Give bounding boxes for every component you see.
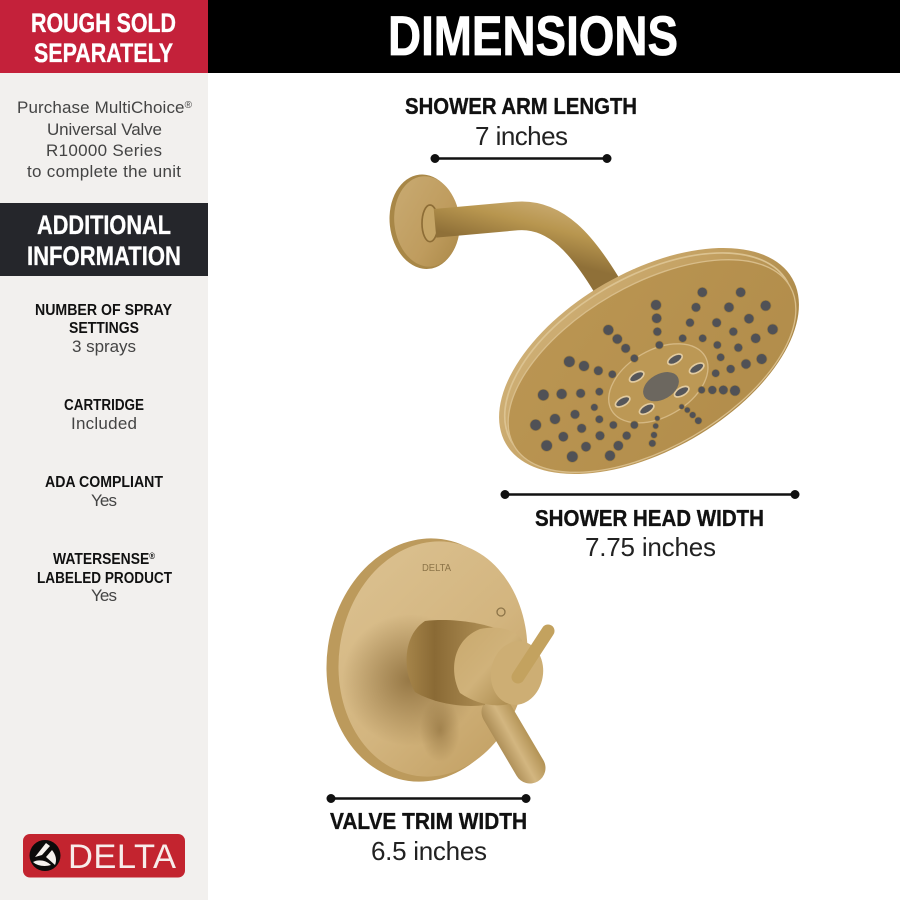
- black title bar: dimensions: [208, 0, 900, 73]
- spec: watersense labeled product: Yes: [91, 586, 117, 605]
- valve cap: [486, 637, 548, 709]
- valve trim width label: 6.5 inches: [371, 836, 487, 866]
- spec: ada compliant: ADA COMPLIANT: [45, 474, 163, 491]
- shower head width dimension line: [501, 490, 799, 498]
- purchase note text: [17, 98, 193, 181]
- center hub: [638, 366, 684, 407]
- shower head width label: [535, 505, 764, 562]
- valve trim width label: VALVE TRIM WIDTH: [330, 808, 527, 834]
- delta logo: [23, 834, 185, 878]
- red header: rough sold separately: SEPARATELY: [34, 38, 173, 68]
- valve trim dimension line: [327, 794, 530, 802]
- purchase note text: Universal Valve: [47, 120, 162, 139]
- purchase note text: Purchase MultiChoice: [17, 98, 185, 117]
- valve front collar: [454, 628, 522, 705]
- purchase note text: to complete the unit: [27, 162, 181, 181]
- shower arm length label: [405, 93, 637, 151]
- shower arm: [435, 216, 607, 285]
- rim highlight: [469, 208, 829, 514]
- trim plate face: [323, 529, 543, 789]
- indicator ring: [497, 608, 505, 616]
- dark header: additional information: ADDITIONAL: [37, 210, 171, 240]
- black title bar: dimensions: DIMENSIONS: [388, 4, 678, 67]
- lower shadow: [420, 698, 460, 762]
- spec: cartridge: CARTRIDGE: [64, 397, 144, 414]
- spec: number of spray settings: SETTINGS: [69, 320, 139, 337]
- spec: cartridge: [64, 397, 144, 433]
- purchase note text: ®: [185, 100, 193, 111]
- spec: watersense labeled product: ®: [149, 551, 155, 561]
- plate logo: DELTA: [422, 563, 451, 574]
- spec: number of spray settings: [35, 302, 172, 356]
- spray nozzles: [530, 287, 778, 462]
- spec: cartridge: Included: [71, 414, 137, 433]
- arm collar: [422, 205, 438, 242]
- red header: rough sold separately: ROUGH SOLD: [31, 8, 176, 38]
- center spray slots: [614, 352, 706, 416]
- spec: watersense labeled product: LABELED PRODUCT: [37, 570, 172, 587]
- dark header: additional information: [0, 203, 208, 276]
- spec: watersense labeled product: WATERSENSE: [53, 551, 164, 568]
- shower head width label: 7.75 inches: [585, 532, 716, 562]
- shower arm length label: SHOWER ARM LENGTH: [405, 93, 637, 119]
- spec: number of spray settings: NUMBER OF SPRAY: [35, 302, 172, 319]
- valve trim illustration: [311, 526, 548, 794]
- shower head face: [473, 216, 831, 516]
- hub shadow: [342, 614, 478, 746]
- center spray ring: [595, 327, 722, 439]
- lower lever: [497, 712, 530, 768]
- spec: watersense labeled product: [37, 551, 172, 605]
- shower head and arm illustration: [385, 171, 837, 521]
- spec: ada compliant: Yes: [91, 491, 117, 510]
- valve trim width label: [330, 808, 527, 866]
- purchase note text: R10000 Series: [46, 141, 162, 160]
- dark header: additional information: INFORMATION: [27, 241, 181, 271]
- trim plate edge: [311, 526, 539, 794]
- spec: number of spray settings: 3 sprays: [72, 337, 136, 356]
- shower arm length label: 7 inches: [475, 121, 568, 151]
- shower head rim: [461, 201, 837, 521]
- red header: rough sold separately: [0, 0, 208, 73]
- shower arm dimension line: [431, 154, 611, 162]
- valve body cylinder: [407, 620, 500, 706]
- wall flange: [385, 171, 464, 272]
- shower head width label: SHOWER HEAD WIDTH: [535, 505, 764, 531]
- spec: ada compliant: [45, 474, 163, 510]
- delta logo: DELTA: [68, 838, 176, 876]
- upper lever: [518, 631, 548, 677]
- left sidebar panel: [0, 0, 208, 900]
